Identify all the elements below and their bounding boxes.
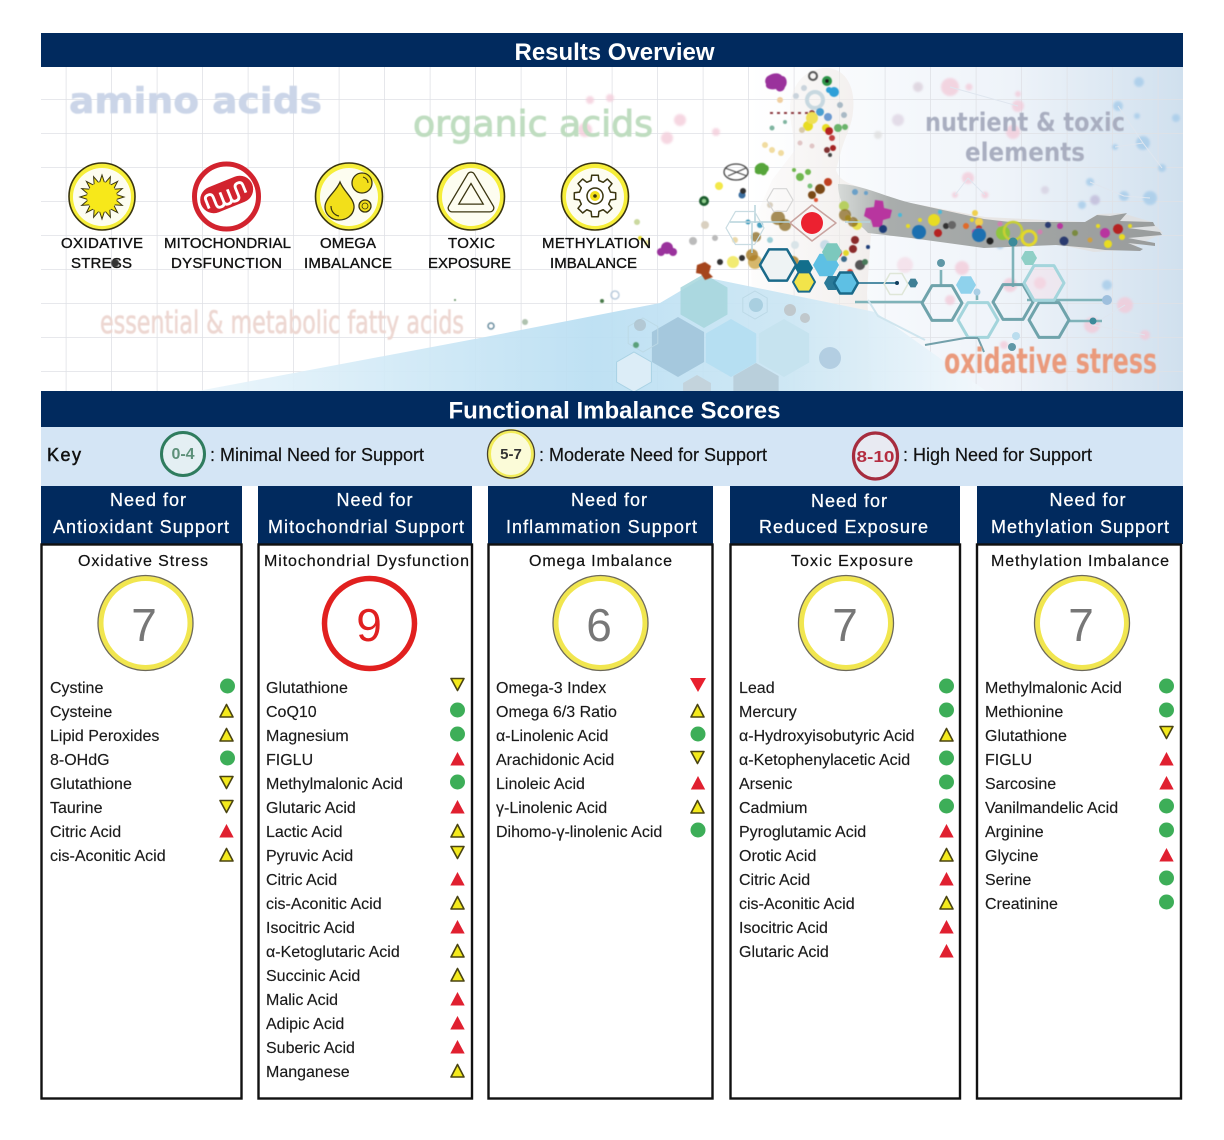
icon labels: TOXIC <box>448 235 495 252</box>
banner word: nutrient and toxic elements: elements <box>965 138 1085 168</box>
icon labels: DYSFUNCTION <box>171 255 282 272</box>
score gauge: 7: 7 <box>131 599 157 651</box>
marker list: Lactic Acid <box>266 824 342 841</box>
marker list: Sarcosine <box>985 776 1056 793</box>
marker list: Methylmalonic Acid <box>985 680 1122 697</box>
marker list: Suberic Acid <box>266 1040 355 1057</box>
marker list: Adipic Acid <box>266 1016 344 1033</box>
marker list: α-Linolenic Acid <box>496 728 608 745</box>
header bar: Results Overview <box>41 33 1183 68</box>
marker list: Cystine <box>50 680 103 697</box>
icon: mitochondrion <box>194 164 258 229</box>
marker list: cis-Aconitic Acid <box>50 848 166 865</box>
marker list: Arsenic <box>739 776 792 793</box>
marker list: FIGLU <box>266 752 313 769</box>
column header: Inflammation Support <box>506 517 697 537</box>
column header: Antioxidant Support <box>53 517 229 537</box>
score gauge: 6 <box>553 576 648 670</box>
arm confetti <box>864 200 892 227</box>
key: high: : High Need for Support <box>903 445 1092 465</box>
marker list: Orotic Acid <box>739 848 816 865</box>
column header: Need for <box>336 490 412 510</box>
column header <box>730 486 960 544</box>
marker list <box>985 678 1174 913</box>
icon labels: IMBALANCE <box>550 255 637 272</box>
marker list: Mercury <box>739 704 797 721</box>
key: moderate: : Moderate Need for Support <box>539 445 767 465</box>
column header: Need for <box>811 491 887 511</box>
header bar: Results Overview: Results Overview <box>514 39 715 66</box>
chest confetti <box>755 163 769 175</box>
header bar: Functional Imbalance Scores: Functional Imbalance Scores <box>448 398 780 424</box>
key: high: 8-10 <box>856 449 895 466</box>
key: high <box>854 433 1092 479</box>
marker list: γ-Linolenic Acid <box>496 800 607 817</box>
banner word: essential and metabolic fatty acids: essential & metabolic fatty acids <box>100 305 464 341</box>
panel: Mitochondrial Support: Mitochondrial Dysfunction <box>264 553 469 570</box>
head confetti <box>765 73 787 91</box>
banner word: amino acids: amino acids <box>69 81 322 122</box>
marker list: cis-Aconitic Acid <box>739 896 855 913</box>
column header <box>258 486 472 544</box>
marker list: Pyroglutamic Acid <box>739 824 866 841</box>
panel: Mitochondrial Support <box>258 486 472 1098</box>
header bar: Functional Imbalance Scores <box>41 391 1183 427</box>
score gauge: 7 <box>798 576 894 670</box>
score gauge: 7 <box>1034 576 1130 670</box>
marker list: Magnesium <box>266 728 349 745</box>
icon: oxidative stress <box>69 163 135 230</box>
icon labels: IMBALANCE <box>304 255 392 272</box>
marker list <box>496 678 706 841</box>
panel: Methylation Support: Methylation Imbalance <box>991 553 1169 570</box>
banner word: nutrient and toxic elements <box>925 108 1125 168</box>
icon: methylation gear <box>562 163 628 230</box>
marker list: Glutathione <box>266 680 348 697</box>
panel: Reduced Exposure <box>730 486 960 1098</box>
column header: Need for <box>1050 490 1126 510</box>
icon: toxic triangle <box>438 163 504 230</box>
column header: Need for <box>571 490 647 510</box>
column header <box>41 486 242 544</box>
marker list: cis-Aconitic Acid <box>266 896 382 913</box>
marker list: Malic Acid <box>266 992 338 1009</box>
marker list: Linoleic Acid <box>496 776 585 793</box>
score gauge: 6: 6 <box>586 599 612 651</box>
marker list: α-Ketophenylacetic Acid <box>739 752 910 769</box>
column header: Mitochondrial Support <box>268 517 464 537</box>
marker list: Pyruvic Acid <box>266 848 353 865</box>
icon labels: OXIDATIVE <box>61 235 143 252</box>
marker list <box>739 678 954 961</box>
panel: Antioxidant Support <box>41 486 242 1098</box>
panel: Inflammation Support <box>488 486 713 1098</box>
marker list: Glutathione <box>985 728 1067 745</box>
banner: body illustration background <box>41 67 1183 415</box>
icon labels <box>61 235 651 272</box>
marker list: Isocitric Acid <box>739 920 828 937</box>
marker list: 8-OHdG <box>50 752 110 769</box>
marker list: Succinic Acid <box>266 968 360 985</box>
score gauge: 7 <box>98 576 193 670</box>
score gauge: 9: 9 <box>356 599 382 651</box>
marker list: FIGLU <box>985 752 1032 769</box>
marker list: α-Ketoglutaric Acid <box>266 944 400 961</box>
key: moderate <box>488 430 767 478</box>
key band <box>41 427 1183 486</box>
panel: Inflammation Support: Omega Imbalance <box>529 553 672 570</box>
key: moderate: 5-7 <box>500 446 522 463</box>
marker list: Lead <box>739 680 775 697</box>
marker list: Citric Acid <box>739 872 810 889</box>
icon labels: OMEGA <box>320 235 376 252</box>
panel: Antioxidant Support: Oxidative Stress <box>78 553 208 570</box>
body silhouette <box>720 68 1163 391</box>
column header: Reduced Exposure <box>759 517 928 537</box>
column header: Methylation Support <box>991 517 1169 537</box>
key: minimal <box>162 432 424 476</box>
marker list: Serine <box>985 872 1031 889</box>
marker list: Lipid Peroxides <box>50 728 159 745</box>
molecular hexagons near chest <box>726 189 1112 352</box>
marker list: Glutaric Acid <box>266 800 356 817</box>
marker list <box>50 678 235 865</box>
icon labels: EXPOSURE <box>428 255 511 272</box>
panel: Methylation Support <box>977 486 1183 1098</box>
score gauge: 9 <box>324 578 414 668</box>
marker list: Methionine <box>985 704 1063 721</box>
panel: Reduced Exposure: Toxic Exposure <box>791 553 913 570</box>
marker list: Citric Acid <box>50 824 121 841</box>
column header <box>977 486 1183 544</box>
marker list: Citric Acid <box>266 872 337 889</box>
key band: Key <box>47 445 81 465</box>
marker list: Glutaric Acid <box>739 944 829 961</box>
marker list: Omega-3 Index <box>496 680 606 697</box>
marker list: Cadmium <box>739 800 807 817</box>
column header <box>488 486 713 544</box>
score gauge: 7: 7 <box>832 599 858 651</box>
key: minimal: 0-4 <box>171 446 195 463</box>
icon labels: MITOCHONDRIAL <box>164 235 291 252</box>
marker list: Methylmalonic Acid <box>266 776 403 793</box>
icon: omega oil drops <box>316 163 382 230</box>
icon labels: STRESS <box>71 255 132 272</box>
marker list: Glycine <box>985 848 1038 865</box>
banner word: organic acids: organic acids <box>413 104 653 145</box>
score gauge: 7: 7 <box>1068 599 1094 651</box>
marker list: Manganese <box>266 1064 350 1081</box>
marker list <box>266 678 465 1081</box>
banner word: nutrient and toxic elements: nutrient & toxic <box>925 108 1125 138</box>
marker list: α-Hydroxyisobutyric Acid <box>739 728 915 745</box>
marker list: Dihomo-γ-linolenic Acid <box>496 824 662 841</box>
marker list: CoQ10 <box>266 704 317 721</box>
marker list: Omega 6/3 Ratio <box>496 704 617 721</box>
column header: Need for <box>110 490 186 510</box>
marker list: Cysteine <box>50 704 112 721</box>
blue cone <box>198 277 986 391</box>
marker list: Arachidonic Acid <box>496 752 614 769</box>
marker list: Vanilmandelic Acid <box>985 800 1118 817</box>
marker list: Creatinine <box>985 896 1058 913</box>
marker list: Arginine <box>985 824 1044 841</box>
marker list: Isocitric Acid <box>266 920 355 937</box>
marker list: Glutathione <box>50 776 132 793</box>
arm <box>838 184 1162 251</box>
marker list: Taurine <box>50 800 103 817</box>
icon labels: METHYLATION <box>542 235 651 252</box>
key: minimal: : Minimal Need for Support <box>210 445 424 465</box>
